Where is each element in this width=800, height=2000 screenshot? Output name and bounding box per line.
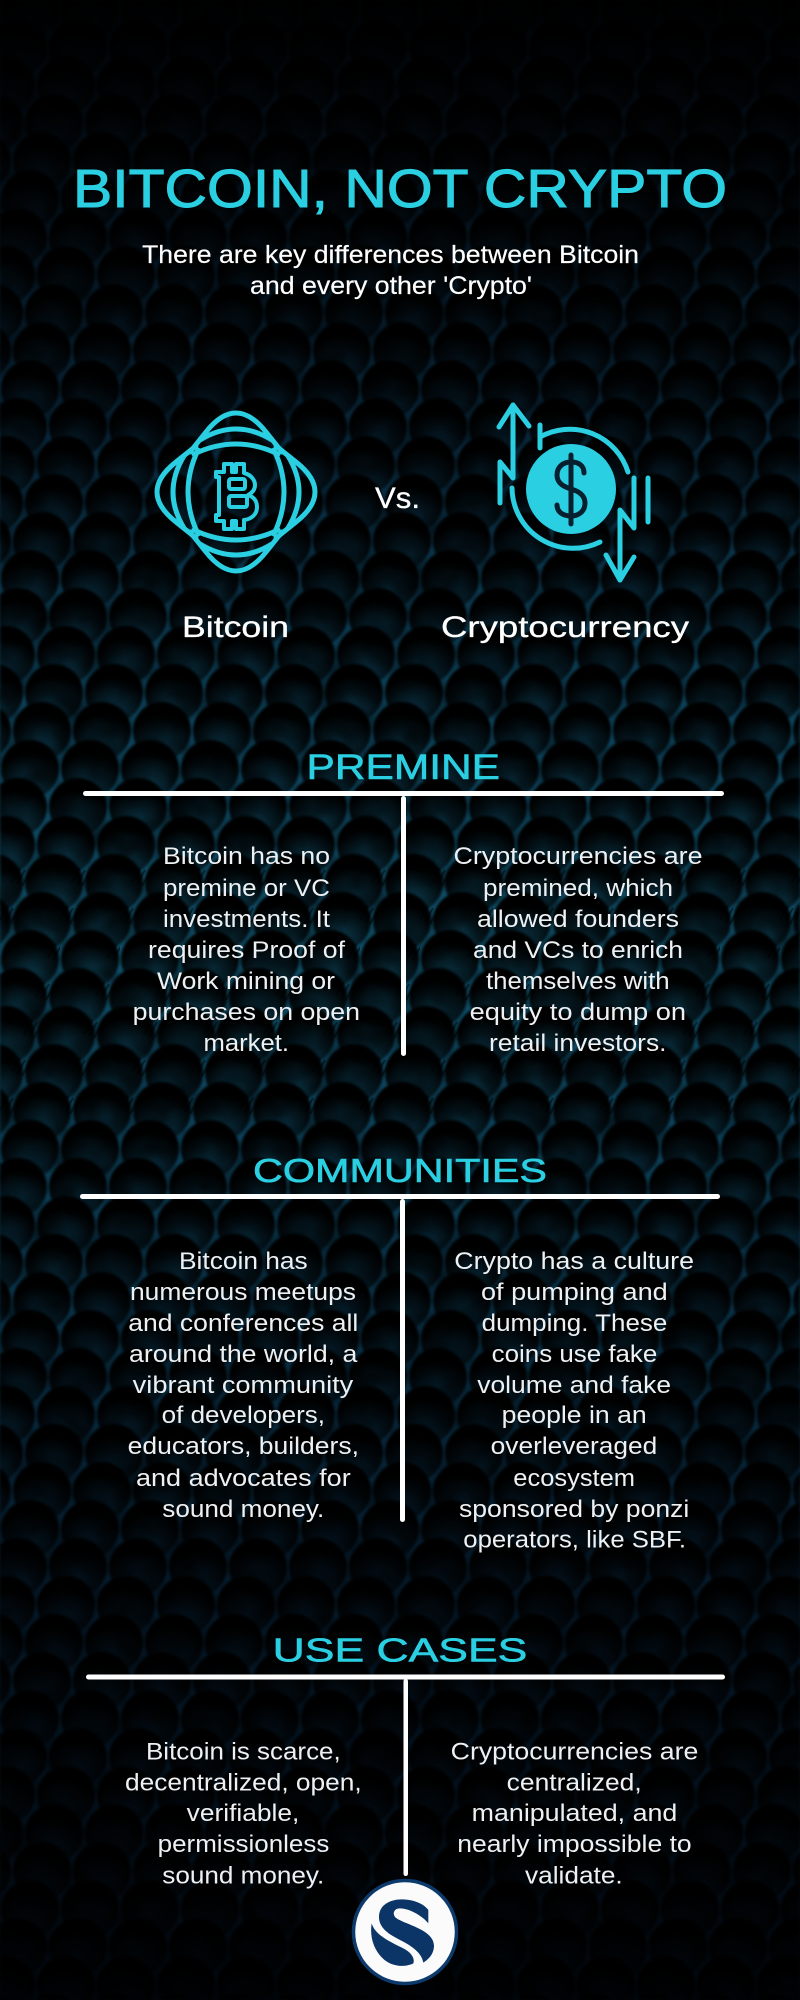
text: communities crypto: overleveraged	[491, 1433, 657, 1460]
text: use cases crypto: centralized,	[507, 1769, 642, 1796]
text: premine bitcoin: purchases on open	[133, 999, 360, 1026]
text: premine bitcoin: market.	[204, 1030, 289, 1057]
text: premine crypto: premined, which	[483, 875, 673, 902]
heading: premine: PREMINE	[306, 748, 500, 787]
text: communities crypto: people in an	[502, 1402, 647, 1429]
text: use cases bitcoin	[125, 1738, 362, 1889]
text: communities crypto: dumping. These	[482, 1310, 667, 1337]
icon: bitcoin globe	[157, 413, 315, 571]
text: use cases bitcoin: permissionless	[158, 1831, 329, 1858]
text: communities bitcoin	[128, 1248, 359, 1523]
panel: premine	[83, 748, 724, 1057]
text: use cases bitcoin: verifiable,	[187, 1800, 299, 1827]
table rule: communities	[80, 1194, 720, 1522]
text: communities crypto: sponsored by ponzi	[459, 1496, 689, 1523]
text: communities crypto: operators, like SBF.	[463, 1526, 686, 1554]
table rule: use cases	[86, 1674, 725, 1876]
icon: cryptocurrency dollar coin with arrows	[499, 405, 648, 580]
text: use cases crypto: validate.	[525, 1862, 623, 1889]
text: use cases crypto: Cryptocurrencies are	[451, 1738, 698, 1765]
logo: S badge	[354, 1880, 456, 1984]
text: communities bitcoin: educators, builders,	[128, 1433, 359, 1460]
text: premine crypto: equity to dump on	[470, 999, 686, 1026]
text: use cases bitcoin: Bitcoin is scarce,	[146, 1738, 341, 1765]
subtitle	[142, 241, 639, 300]
table rule: premine	[83, 791, 724, 1056]
text: communities bitcoin: and advocates for	[136, 1465, 351, 1492]
text: use cases bitcoin: sound money.	[162, 1862, 324, 1889]
text: premine crypto: retail investors.	[489, 1030, 666, 1057]
text: premine bitcoin: premine or VC	[163, 875, 330, 902]
versus label: Vs.	[375, 482, 420, 515]
text: premine bitcoin: Bitcoin has no	[163, 843, 330, 870]
text: communities crypto: Crypto has a culture	[454, 1248, 694, 1275]
text: communities crypto: of pumping and	[481, 1279, 668, 1306]
text: use cases crypto: nearly impossible to	[457, 1831, 692, 1858]
heading: communities: COMMUNITIES	[253, 1153, 547, 1190]
text: premine crypto	[454, 843, 702, 1057]
text: communities bitcoin: vibrant community	[133, 1372, 353, 1399]
text: communities bitcoin: of developers,	[162, 1402, 325, 1429]
text: communities bitcoin: around the world, a	[129, 1341, 358, 1368]
text: communities crypto	[454, 1248, 694, 1554]
text: premine crypto: and VCs to enrich	[473, 937, 683, 964]
text: premine bitcoin	[133, 843, 360, 1057]
heading: use cases: USE CASES	[273, 1633, 527, 1670]
text: use cases bitcoin: decentralized, open,	[125, 1769, 362, 1796]
text: premine bitcoin: Work mining or	[157, 968, 335, 995]
text: communities crypto: volume and fake	[477, 1372, 671, 1399]
panel: use cases	[86, 1633, 725, 1889]
label: Cryptocurrency: Cryptocurrency	[441, 611, 689, 644]
text: premine crypto: allowed founders	[477, 906, 679, 933]
subtitle: and every other 'Crypto'	[250, 272, 532, 300]
text: premine crypto: Cryptocurrencies are	[454, 843, 702, 870]
text: premine crypto: themselves with	[486, 968, 670, 995]
text: use cases crypto: manipulated, and	[472, 1800, 677, 1827]
text: premine bitcoin: investments. It	[163, 906, 330, 933]
text: communities bitcoin: and conferences all	[128, 1310, 358, 1337]
text: communities crypto: ecosystem	[513, 1465, 635, 1492]
text: communities bitcoin: Bitcoin has	[179, 1248, 308, 1275]
title: BITCOIN, NOT CRYPTO	[73, 159, 727, 219]
panel: communities	[80, 1153, 720, 1554]
text: use cases crypto	[451, 1738, 698, 1889]
text: communities bitcoin: numerous meetups	[130, 1279, 356, 1306]
text: premine bitcoin: requires Proof of	[148, 937, 345, 964]
subtitle: There are key differences between Bitcoin	[142, 241, 639, 269]
text: communities crypto: coins use fake	[492, 1341, 657, 1368]
text: communities bitcoin: sound money.	[162, 1496, 324, 1523]
label: Bitcoin: Bitcoin	[182, 611, 289, 644]
